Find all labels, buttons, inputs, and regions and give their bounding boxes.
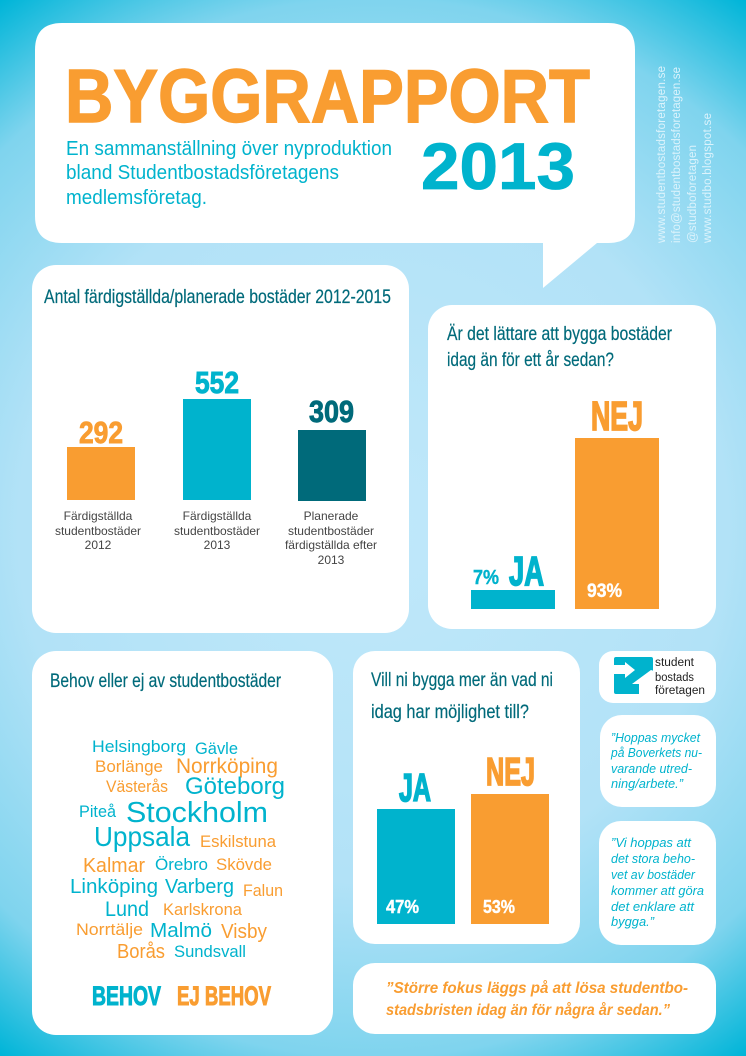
bar: nej	[575, 393, 659, 609]
bar 2013: 2013	[204, 538, 231, 552]
bar 2013	[174, 365, 260, 552]
contact details: www.studbo.blogspot.se	[702, 113, 714, 244]
logo text	[655, 657, 705, 697]
word cloud: Borås	[117, 941, 165, 963]
contact details: info@studentbostadsforetagen.se	[671, 67, 683, 243]
quote: boverket	[600, 715, 716, 807]
bubble shape	[35, 23, 635, 288]
bar planned: 2013	[318, 553, 345, 567]
subtitle: medlemsföretag.	[66, 187, 207, 209]
heading: Antal färdigställda/planerade bostäder 2012-2015	[44, 286, 391, 308]
word cloud: Helsingborg	[92, 737, 186, 756]
heading: idag har möjlighet till?	[371, 701, 529, 723]
bar planned: studentbostäder	[288, 524, 374, 538]
word cloud	[70, 737, 285, 963]
quote text: vet av bostäder	[611, 867, 696, 882]
heading: idag än för ett år sedan?	[447, 349, 614, 371]
bar 2012: 292	[79, 415, 123, 450]
contact details	[656, 66, 714, 244]
panel: completed and planned housing	[32, 265, 409, 633]
word cloud: Norrköping	[176, 755, 278, 778]
word cloud: Falun	[243, 882, 283, 900]
heading	[447, 323, 672, 371]
word cloud: Piteå	[79, 803, 117, 821]
title: BYGGRAPPORT	[65, 54, 590, 138]
panel: easier to build	[428, 305, 716, 629]
panel background	[32, 265, 409, 633]
bar: nej	[471, 751, 549, 924]
bar 2012: 2012	[85, 538, 112, 552]
legend: ej behov: EJ BEHOV	[177, 981, 271, 1011]
heading: Behov eller ej av studentbostäder	[50, 670, 281, 692]
bar 2012: studentbostäder	[55, 524, 141, 538]
bar: nej: 93%	[587, 581, 622, 602]
bar 2013: Färdigställda	[183, 509, 252, 523]
bar: nej: NEJ	[591, 393, 643, 439]
contact details: www.studentbostadsforetagen.se	[656, 66, 668, 244]
word cloud: Lund	[105, 898, 149, 921]
heading: Vill ni bygga mer än vad ni	[371, 669, 553, 691]
quote background	[600, 715, 716, 807]
quote text: ”Hoppas mycket	[611, 730, 701, 745]
bar planned	[285, 394, 377, 567]
word cloud: Varberg	[165, 876, 234, 898]
bar chart	[55, 365, 377, 567]
quote text: det stora beho-	[611, 851, 696, 866]
bar: ja: JA	[509, 548, 544, 594]
logo text: företagen	[655, 685, 705, 697]
quote: housing need	[599, 821, 716, 945]
quote text: ”Vi hoppas att	[611, 835, 692, 850]
quote text: kommer att göra	[611, 883, 704, 898]
bar 2013: 552	[195, 365, 239, 400]
word cloud: Eskilstuna	[200, 833, 277, 851]
panel background	[32, 651, 333, 1035]
quote text: stadsbristen idag än för några år sedan.”	[386, 1002, 670, 1019]
subtitle: bland Studentbostadsföretagens	[66, 162, 339, 184]
bar: nej: 53%	[483, 897, 515, 917]
bar planned: 309	[309, 394, 354, 429]
bar planned: Planerade	[304, 509, 359, 523]
panel background	[353, 651, 580, 944]
panel: need for student housing	[32, 651, 333, 1035]
word cloud: Västerås	[106, 778, 168, 796]
word cloud: Skövde	[216, 856, 272, 874]
word cloud: Karlskrona	[163, 901, 243, 919]
icon: logo arrows	[613, 657, 654, 695]
bar 2012	[55, 415, 141, 552]
bar: nej: NEJ	[486, 751, 535, 794]
quote text: varande utred-	[611, 761, 693, 776]
contact details: @studboforetagen	[687, 145, 699, 243]
bar planned: färdigställda efter	[285, 538, 377, 552]
bar: ja: 7%	[473, 567, 499, 589]
word cloud: Linköping	[70, 876, 158, 898]
word cloud: Uppsala	[94, 821, 190, 852]
heading	[371, 669, 553, 723]
word cloud: Visby	[221, 921, 267, 943]
year: 2013	[421, 129, 575, 203]
quote text: det enklare att	[611, 899, 695, 914]
word cloud: Stockholm	[126, 797, 268, 829]
logo text: bostads	[655, 672, 694, 684]
bar: ja: JA	[399, 767, 431, 810]
bar 2012: Färdigställda	[64, 509, 133, 523]
word cloud: Gävle	[195, 740, 238, 758]
word cloud: Norrtälje	[76, 921, 143, 939]
subtitle: En sammanställning över nyproduktion	[66, 138, 392, 160]
quote background	[599, 821, 716, 945]
bar 2013: studentbostäder	[174, 524, 260, 538]
heading: Är det lättare att bygga bostäder	[447, 323, 672, 345]
quote text: på Boverkets nu-	[610, 745, 703, 760]
word cloud: Örebro	[155, 856, 208, 874]
header speech bubble	[35, 23, 635, 288]
logo panel	[599, 651, 716, 703]
legend: behov: BEHOV	[92, 981, 161, 1011]
quote text: ning/arbete.”	[611, 776, 684, 791]
logo background	[599, 651, 716, 703]
panel: build more	[353, 651, 580, 944]
panel background	[428, 305, 716, 629]
bar: ja	[377, 767, 455, 924]
quote text: bygga.”	[611, 914, 655, 929]
quote background	[353, 963, 716, 1034]
word cloud: Malmö	[150, 920, 212, 942]
word cloud: Sundsvall	[174, 943, 246, 961]
logo text: student	[655, 657, 695, 669]
quote text: ”Större fokus läggs på att lösa studentbo-	[386, 980, 688, 997]
word cloud: Göteborg	[185, 773, 285, 800]
quote: larger focus	[353, 963, 716, 1034]
bar: ja: 47%	[386, 897, 419, 917]
word cloud: Kalmar	[83, 855, 145, 877]
bar: ja	[471, 548, 555, 609]
subtitle	[66, 138, 392, 209]
word cloud: Borlänge	[95, 758, 163, 776]
